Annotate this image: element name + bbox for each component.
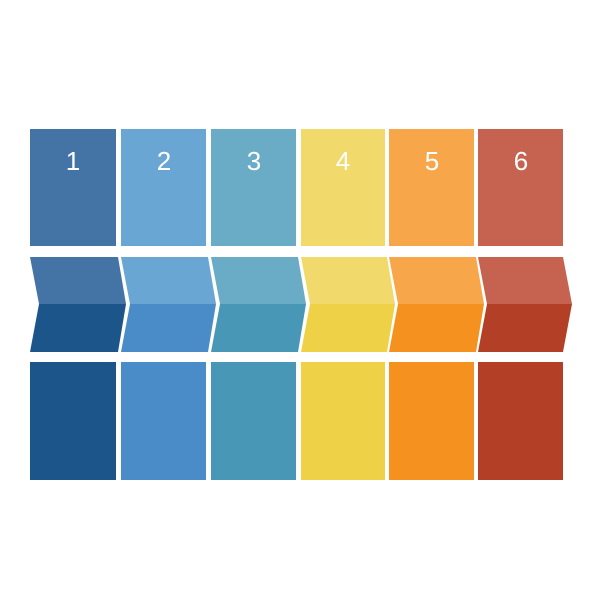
top box 1 bbox=[30, 129, 116, 246]
top box 4 bbox=[301, 129, 385, 246]
chevron 1 bbox=[30, 257, 126, 352]
bottom box 6 bbox=[478, 362, 563, 480]
chevron 5 bbox=[389, 257, 484, 352]
step 1 column bbox=[30, 129, 126, 480]
chevron 4 bbox=[301, 257, 395, 352]
bottom box 2 bbox=[121, 362, 206, 480]
step 3 column bbox=[211, 129, 306, 480]
bottom box 3 bbox=[211, 362, 296, 480]
top box 5: 5 bbox=[425, 146, 439, 176]
bottom box 5 bbox=[389, 362, 474, 480]
bottom box 4 bbox=[301, 362, 385, 480]
chevron 3 bbox=[211, 257, 306, 352]
top box 3 bbox=[211, 129, 296, 246]
chevron 2 bbox=[121, 257, 216, 352]
top box 6: 6 bbox=[514, 146, 528, 176]
top box 6 bbox=[478, 129, 563, 246]
bottom box 1 bbox=[30, 362, 116, 480]
step 4 column bbox=[301, 129, 395, 480]
step 6 column bbox=[478, 129, 572, 480]
top box 5 bbox=[389, 129, 474, 246]
top box 4: 4 bbox=[336, 146, 350, 176]
step 2 column bbox=[121, 129, 216, 480]
top box 2 bbox=[121, 129, 206, 246]
chevron 6 bbox=[478, 257, 572, 352]
top box 2: 2 bbox=[157, 146, 171, 176]
step 5 column bbox=[389, 129, 484, 480]
top box 1: 1 bbox=[66, 146, 80, 176]
top box 3: 3 bbox=[247, 146, 261, 176]
